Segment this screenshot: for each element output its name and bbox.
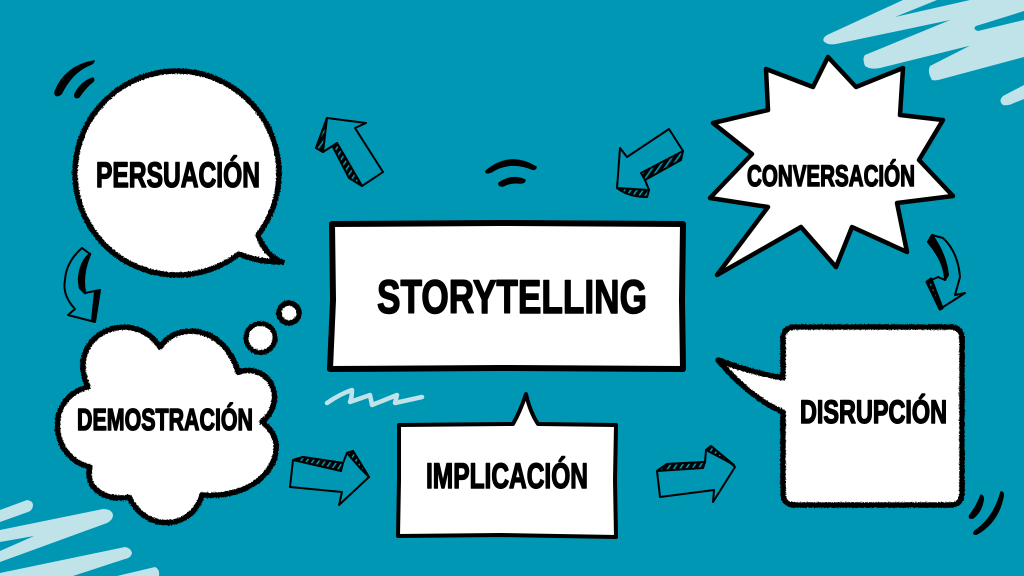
arrow: storytelling to persuación xyxy=(316,118,383,186)
panel: implicación xyxy=(398,394,616,537)
label conversación: CONVERSACIÓN xyxy=(747,159,915,193)
panel: conversación xyxy=(710,57,953,275)
brush strokes: bottom left xyxy=(0,500,159,576)
arrow: implicación to disrupción xyxy=(657,446,735,502)
speech box with upward tail xyxy=(398,394,616,537)
arrow: conversación to storytelling xyxy=(617,129,683,197)
accent marks: top left xyxy=(55,61,94,98)
accent marks: bottom right xyxy=(969,492,1003,534)
arrow: persuación to demostración xyxy=(64,248,100,322)
panel: demostración xyxy=(57,303,299,523)
panel: storytelling xyxy=(330,223,683,369)
thought bubble large xyxy=(246,324,275,352)
label implicación: IMPLICACIÓN xyxy=(426,456,588,496)
label persuación: PERSUACIÓN xyxy=(96,155,260,195)
arrow: demostración to implicación xyxy=(290,451,369,505)
accent marks: center xyxy=(486,160,536,186)
label demostración: DEMOSTRACIÓN xyxy=(77,401,253,437)
speech bubble circle xyxy=(75,71,282,275)
panel: disrupción xyxy=(718,327,962,505)
squiggle xyxy=(327,390,422,405)
label storytelling: STORYTELLING xyxy=(377,271,647,324)
label disrupción: DISRUPCIÓN xyxy=(800,394,947,430)
arrow: conversación to disrupción xyxy=(927,235,965,309)
panel: persuación xyxy=(75,71,282,275)
brush strokes: top right xyxy=(823,0,1024,105)
rounded speech box xyxy=(718,327,962,505)
thought bubble small xyxy=(279,303,299,323)
starburst bubble xyxy=(710,57,953,275)
central rectangle xyxy=(330,223,683,369)
thought cloud xyxy=(57,327,276,523)
